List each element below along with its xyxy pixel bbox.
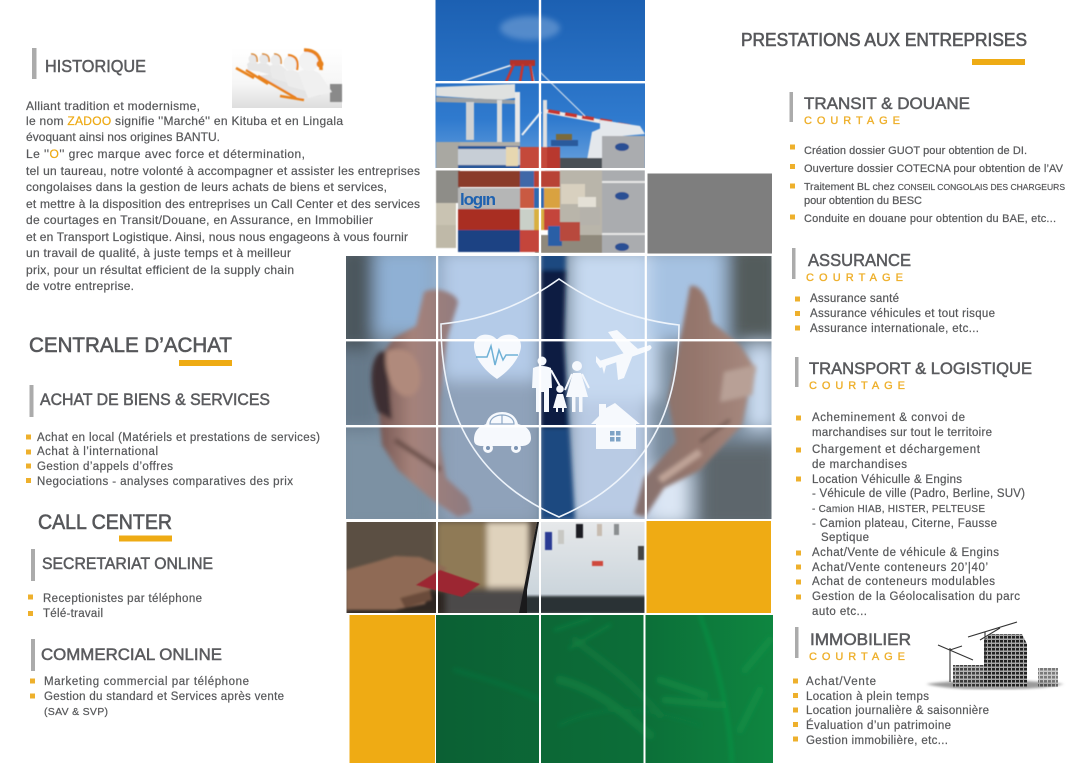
subheading: immobilier (795, 627, 911, 663)
list: transit: Traitement BL chez CONSEIL CONGOLAIS DES CHARGEURS (804, 181, 1065, 193)
icon: family (532, 356, 589, 412)
text block: historique body: Alliant tradition et modernisme, (26, 99, 200, 113)
list: transport: - Camion HIAB, HISTER, PELTEUSE (812, 504, 985, 515)
list: immobilier: Location à plein temps (806, 691, 929, 703)
heading: call center: CALL CENTER (38, 511, 172, 534)
panel: centrale d'achat (26, 334, 320, 488)
text block: historique body: évoquant ainsi nos origines BANTU. (26, 130, 220, 144)
icon: heart with pulse (474, 335, 521, 379)
subheading: transport et logistique (795, 357, 1032, 392)
panel: immobilier (793, 622, 1064, 747)
list: transport: Chargement et déchargement (812, 444, 981, 456)
list: assurance: Assurance santé (810, 293, 899, 305)
heading: historique: HISTORIQUE (45, 56, 146, 76)
heading: prestations aux entreprises (741, 30, 1027, 65)
list: immobilier: Évaluation d’un patrimoine (806, 719, 951, 732)
subheading: achat de biens et services: ACHAT DE BIENS & SERVICES (40, 391, 270, 409)
subheading: assurance: COURTAGE (806, 272, 903, 284)
list: transport: - Camion plateau, Citerne, Fausse (812, 518, 997, 530)
heading: historique (32, 48, 146, 79)
list: immobilier: Achat/Vente (806, 676, 876, 688)
subheading: transport et logistique: COURTAGE (809, 380, 905, 392)
block: orange square top (646, 521, 771, 613)
list: transport: Achat/Vente de véhicule & Engins (812, 547, 999, 559)
grid lines over photos (346, 0, 772, 763)
text block: historique body: de votre entreprise. (26, 279, 134, 293)
text: container logo: logın (460, 190, 496, 209)
text block: historique body: Le ''O'' grec marque avec force et détermination, (26, 147, 305, 161)
heading: centrale d'achat: CENTRALE D’ACHAT (29, 334, 232, 357)
text block: historique body: et mettre à la disposition des entreprises un Call Center et des services (26, 197, 420, 211)
subheading: transit et douane: COURTAGE (804, 115, 900, 127)
list: immobilier: Location journalière & saisonnière (806, 705, 989, 717)
photo: green palm leaves (436, 615, 773, 763)
text block: historique body: le nom ZADOO signifie ''Marché'' en Kituba et en Lingala (26, 114, 343, 128)
subheading: assurance (792, 248, 911, 284)
list: immobilier: Gestion immobilière, etc... (806, 735, 948, 747)
subheading: transit et douane: TRANSIT & DOUANE (804, 95, 970, 113)
list: transit: Conduite en douane pour obtention du BAE, etc... (804, 213, 1056, 225)
text block: historique body: tel un taureau, notre volonté à accompagner et assister les entreprises (26, 164, 420, 178)
list: transport: Gestion de la Géolocalisation du parc (812, 591, 1020, 603)
list: commercial (30, 676, 284, 718)
list: assurance (795, 293, 995, 335)
list: transport: marchandises sur tout le territoire (812, 427, 992, 439)
list: transit (790, 144, 1065, 225)
subheading: secretariat online: SECRETARIAT ONLINE (42, 555, 213, 573)
block: orange square bottom (350, 615, 435, 763)
icon: house (591, 403, 640, 449)
list: transit: Création dossier GUOT pour obtention de DI. (804, 145, 1027, 157)
photo: container port with crane (435, 0, 646, 253)
list: achat: Achat en local (Matériels et prestations de services) (37, 432, 320, 444)
list: transport (796, 412, 1025, 618)
icon: building under construction sketch (926, 622, 1064, 689)
icon: airplane (596, 330, 652, 380)
text block: historique body: prix, pour un résultat efficient de la supply chain (26, 263, 294, 277)
text block: historique body: de courtages en Transit/Douane, en Assurance, en Immobilier (26, 213, 373, 227)
list: transit: Ouverture dossier COTECNA pour obtention de l’AV (804, 163, 1064, 175)
list: achat: Achat à l’international (37, 446, 158, 458)
panel: historique (26, 48, 420, 293)
subheading: commercial online (31, 639, 222, 671)
icon: call center operators (232, 48, 342, 108)
panel: assurance (792, 248, 995, 335)
subheading: assurance: ASSURANCE (808, 250, 911, 270)
block: grey square (648, 174, 772, 254)
list: secretariat (28, 593, 202, 620)
list: transport: de marchandises (812, 459, 907, 471)
list: transport: Acheminement & convoi de (812, 412, 965, 424)
list: transport: - Véhicule de ville (Padro, Berline, SUV) (812, 488, 1025, 500)
subheading: achat de biens et services (30, 385, 270, 417)
panel: transit et douane (790, 92, 1065, 225)
icon: car (474, 412, 531, 453)
text block: historique body: congolaises dans la gestion de leurs achats de biens et services, (26, 180, 387, 194)
list: assurance: Assurance véhicules et tout risque (810, 308, 995, 320)
subheading: commercial online: COMMERCIAL ONLINE (41, 646, 222, 664)
panel: central photo mosaic (335, 0, 780, 763)
list: commercial: Gestion du standard et Services après vente (44, 691, 284, 703)
icon: protective shield outline (441, 279, 679, 517)
list: transport: Location Véhiculle & Engins (812, 474, 962, 486)
heading: prestations aux entreprises: PRESTATIONS AUX ENTREPRISES (741, 30, 1027, 50)
list: achat (26, 432, 320, 488)
list: transport: auto etc... (812, 606, 867, 618)
photo: hands holding insurance shield (346, 256, 772, 519)
text block: historique body: et en Transport Logistique. Ainsi, nous nous engageons à vous fournir (26, 230, 408, 244)
list: secretariat: Télé-travail (43, 608, 103, 620)
list: transport: Septique (821, 532, 869, 544)
subheading: secretariat online (31, 549, 213, 581)
panel: call center (28, 511, 284, 718)
list: transport: Achat de conteneurs modulables (812, 576, 995, 588)
subheading: immobilier: IMMOBILIER (810, 631, 911, 649)
list: transport: Achat/Vente conteneurs 20’|40’ (812, 562, 988, 574)
list: commercial: (SAV & SVP) (44, 706, 108, 718)
subheading: transport et logistique: TRANSPORT & LOGISTIQUE (809, 360, 1032, 378)
photo: card payment on laptop (346, 522, 646, 615)
panel: transport et logistique (795, 357, 1032, 618)
list: secretariat: Receptionistes par téléphone (43, 593, 202, 605)
list: achat: Gestion d’appels d’offres (37, 461, 173, 473)
subheading: transit et douane (790, 92, 970, 127)
list: immobilier (793, 676, 989, 747)
list: transit: pour obtention du BESC (804, 195, 922, 207)
list: achat: Negociations - analyses comparatives des prix (37, 476, 293, 488)
list: commercial: Marketing commercial par téléphone (44, 676, 249, 688)
text block: historique body (26, 99, 420, 293)
subheading: immobilier: COURTAGE (809, 651, 905, 663)
list: assurance: Assurance internationale, etc... (810, 323, 979, 335)
text block: historique body: un travail de qualité, à juste temps et à meilleur (26, 246, 291, 260)
